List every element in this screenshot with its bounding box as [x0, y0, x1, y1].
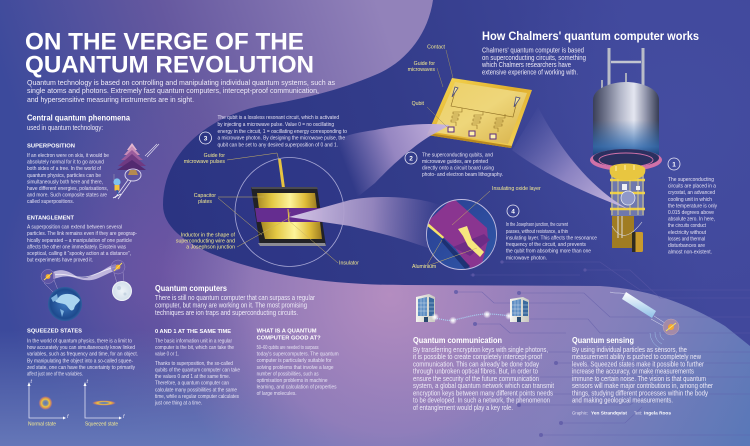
callouts on junction — [412, 186, 541, 270]
heading: central quantum phenomena: used in quantum technology: — [27, 123, 103, 132]
trace end dots — [454, 260, 587, 437]
text block: 0 and 1 at the same time: Therefore, a quantum computer can — [155, 381, 229, 387]
text block: squeezed states: affect just one of the variables. — [27, 372, 83, 378]
text block: 0 and 1 at the same time: value 0 or 1. — [155, 352, 179, 358]
step 3 text — [218, 115, 347, 148]
step 1 text: disturbances are — [668, 243, 705, 249]
chart: normal state: t — [30, 379, 32, 385]
step 1 number: 1 — [672, 162, 676, 168]
text block: what is a quantum computer good at: WHAT IS A QUANTUM — [257, 328, 317, 334]
step 4 number — [507, 205, 519, 217]
text block: quantum sensing: things, studying different processes within the body — [572, 388, 708, 397]
step 1 text: almost non-existent. — [668, 250, 712, 256]
dark panel: how the quantum computer works — [163, 0, 750, 346]
callouts around qubit: microwave pulses — [184, 159, 225, 165]
heading: central quantum phenomena: Central quantum phenomena — [27, 112, 130, 122]
text block: 0 and 1 at the same time: time, while a regular computer calculates — [155, 394, 239, 400]
step 1 text: losses and thermal — [668, 236, 705, 242]
text block: quantum communication — [413, 335, 554, 412]
text block: what is a quantum computer good at: learning, and calculation of properties — [257, 385, 337, 391]
text block: quantum communication: ensure the security of the future communication — [413, 374, 539, 383]
text block: quantum computers: Quantum computers — [155, 283, 227, 293]
step 1 text — [668, 177, 717, 256]
intro text: single atoms and photons. Extremely fast quantum computers, intercept-proof communication, — [27, 86, 319, 95]
text block: 0 and 1 at the same time — [154, 329, 240, 406]
text block: what is a quantum computer good at: 50–60 qubits are needed to surpass — [257, 345, 319, 351]
step 3 number: 3 — [204, 136, 208, 142]
text block: quantum computers — [155, 283, 315, 317]
text block: superposition: If an electron were on skis, it would be — [27, 153, 109, 159]
step 1 text: The superconducting — [668, 177, 714, 183]
text block: quantum communication: system, a global quantum network which can transmit — [413, 381, 554, 390]
beam: chip qubit to step 3 — [335, 124, 450, 215]
step 1 text: circuits are placed in a — [668, 184, 716, 190]
text block: entanglement: hically separated – a manipulation of one particle — [27, 238, 132, 244]
text block: what is a quantum computer good at — [257, 328, 339, 397]
heading: central quantum phenomena — [27, 112, 130, 132]
title: QUANTUM REVOLUTION — [25, 52, 314, 78]
text block: squeezed states: how accurately you can simultaneously know linked — [27, 345, 135, 351]
step 1 text: 0.015 degrees above — [668, 210, 714, 216]
text block: 0 and 1 at the same time: just one thing at a time. — [154, 400, 202, 406]
text block: squeezed states: SQUEEZED STATES — [27, 328, 82, 334]
text block: 0 and 1 at the same time: the values 0 and 1 at the same time. — [155, 374, 230, 380]
callouts around qubit: a Josephson junction — [186, 245, 235, 251]
step 4 text: insulating layer. This affects the resonance — [506, 235, 597, 241]
text block: quantum communication: By transferring encryption keys with single photons, — [413, 345, 548, 354]
callouts around qubit: Insulator — [339, 261, 359, 267]
text block: quantum communication: through unbroken optical fibres. But, in order to — [413, 367, 538, 376]
text block: quantum communication: it is possible to create completely intercept-proof — [413, 352, 543, 361]
text block: quantum sensing: and making geological measurements. — [572, 396, 673, 405]
text block: entanglement: but experiments have proved it. — [27, 258, 93, 264]
text block: quantum sensing: increase the accuracy, or make measurements — [572, 367, 694, 376]
intro text: Quantum technology is based on controlling and manipulating individual quantum systems, such as — [27, 78, 335, 87]
intro text: and hypersensitive measuring instruments are in sight. — [27, 95, 194, 104]
text block: quantum sensing: measurement ability is pushed to completely new — [572, 352, 702, 361]
intro: chalmers: Chalmers' quantum computer is based — [482, 46, 584, 54]
step 4 text: passes, without resistance, a thin — [506, 229, 568, 235]
step 3 text: The qubit is a lossless resonant circuit, which is activated — [218, 115, 339, 121]
text block: 0 and 1 at the same time: calculate many possibilities at the same — [155, 387, 237, 393]
step 4 text: microwave photon. — [506, 256, 547, 262]
callouts on chip: Qubit — [412, 101, 425, 107]
step 4 text: the qubit from absorbing more than one — [506, 249, 591, 255]
text block: 0 and 1 at the same time: qubits of the quantum computer can take — [155, 368, 240, 374]
text block: quantum communication: communication. This can already be done today — [413, 360, 539, 368]
text block: quantum sensing — [572, 335, 713, 405]
credits: Text: — [634, 410, 642, 416]
callouts around qubit — [176, 153, 359, 267]
step 4 text — [506, 222, 597, 262]
text block: entanglement: sceptical, calling it “spooky action at a distance”, — [27, 251, 131, 257]
text block: superposition: both sides of a tree. In the world of — [27, 166, 102, 172]
text block: quantum sensing: levels. Squeezed states make it possible to further — [572, 360, 704, 368]
beam: cryostat to chip — [512, 107, 628, 209]
credits: Graphic: — [572, 410, 588, 416]
step 2 number — [405, 152, 417, 164]
intro: chalmers: extensive experience of working with. — [482, 67, 578, 76]
text block: quantum communication: encryption keys between many different points needs — [413, 388, 553, 397]
text block: 0 and 1 at the same time: The basic information unit in a regular — [155, 338, 232, 344]
step 2 text: photo- and electron beam lithography. — [422, 172, 503, 178]
step 2 text: directly onto a circuit board using — [422, 166, 494, 172]
josephson junction magnifier — [425, 198, 496, 270]
quantum chip — [427, 78, 532, 148]
chart: normal state: Normal state — [28, 422, 56, 428]
callouts on chip: Contact — [427, 45, 446, 51]
entanglement illustration: earth, moon, entangled particles — [41, 260, 132, 321]
callouts on chip: microwaves — [408, 67, 435, 73]
text block: superposition: quantum physics, particles can be — [27, 173, 101, 179]
text block: what is a quantum computer good at: today's supercomputers. The quantum — [257, 352, 339, 358]
text block: quantum communication: of entanglement would play a key role. — [413, 403, 513, 412]
text block: what is a quantum computer good at: computer is particularly suitable for — [257, 358, 332, 364]
step 1 text: electricity without — [668, 230, 707, 236]
step 2 text: microwave guides, are printed — [422, 159, 488, 165]
text block: quantum computers: computer, but many are working on it. The most promising — [155, 300, 307, 309]
callouts on junction: Insulating oxide layer — [492, 186, 541, 192]
text block: 0 and 1 at the same time: 0 AND 1 AT THE SAME TIME — [155, 329, 231, 335]
step 1 text: the circuits conduct — [668, 223, 706, 229]
chart: normal state: f — [67, 414, 69, 420]
step 1 text: the temperature is only — [668, 203, 717, 209]
text block: superposition: called superpositions. — [27, 199, 74, 205]
intro: chalmers: which Chalmers researchers have — [481, 60, 571, 69]
callouts around qubit: Guide for — [204, 153, 225, 159]
text block: what is a quantum computer good at: COMPUTER GOOD AT? — [257, 336, 321, 342]
callouts on chip — [408, 45, 453, 127]
text block: quantum sensing: sensors will make major contributions in, among other — [572, 381, 713, 390]
text block: quantum communication: to be developed. In such a network, the phenomenon — [413, 396, 550, 405]
text block: 0 and 1 at the same time: Thanks to superposition, the so-called — [155, 361, 233, 367]
text block: superposition: simultaneously both here and there, — [27, 179, 103, 185]
text block: superposition: have different energies, polarisations, — [27, 186, 108, 192]
callouts around qubit: Capacitor — [194, 193, 216, 199]
step 1 number — [668, 158, 680, 170]
text block: quantum sensing: By using individual particles as sensors, the — [572, 345, 687, 354]
text block: entanglement: ENTANGLEMENT — [27, 216, 75, 222]
text block: quantum sensing: Quantum sensing — [572, 335, 634, 345]
step 4 number: 4 — [511, 208, 515, 216]
chart: squeezed state: Squeezed state — [85, 422, 118, 428]
text block: squeezed states: zed state, one can have the uncertainty to primarily — [27, 365, 135, 371]
text block: squeezed states — [27, 328, 138, 378]
text block: quantum communication: Quantum communication — [413, 335, 502, 345]
callouts around qubit: plates — [198, 199, 212, 205]
step 4 text: In the Josephson junction, the current — [506, 222, 568, 228]
icon: skier passing both sides of a tree — [113, 143, 159, 199]
title: ON THE VERGE OF THE — [25, 28, 304, 56]
text block: what is a quantum computer good at: optimisation problems in machine — [257, 378, 328, 384]
text block: what is a quantum computer good at: number of possibilities, such as — [257, 371, 319, 377]
qubit magnifier circle with capacitor plates — [235, 158, 344, 266]
callouts around qubit: Inductor in the shape of — [181, 233, 236, 239]
callouts on chip: Guide for — [414, 61, 435, 67]
chart: normal state — [28, 379, 69, 428]
text block: 0 and 1 at the same time: computer is the bit, which can take the — [155, 345, 234, 351]
callouts around qubit: superconducting wire and — [176, 239, 235, 245]
text block: entanglement: affects the other one immediately. Einstein was — [27, 244, 126, 250]
text block: superposition: absolutely normal for it to go around — [27, 160, 104, 166]
icon: buildings linked by photons — [416, 294, 529, 324]
circuit traces — [456, 262, 750, 435]
callouts on junction: Aluminium — [412, 264, 436, 270]
step 3 text: a microwave photon. By designing the microwave pulse, the — [218, 136, 345, 142]
title — [25, 28, 314, 78]
text block: squeezed states: In the world of quantum physics, there is a limit to — [27, 338, 132, 344]
step 1 text: absolute zero. In here, — [668, 217, 715, 223]
credits — [572, 410, 672, 416]
text block: squeezed states: By manipulating the object into a so-called squee- — [27, 358, 133, 364]
step 1 text: cryostat, an advanced — [668, 190, 715, 196]
text block: superposition — [27, 144, 109, 205]
chart: squeezed state: f — [123, 414, 125, 420]
text block: entanglement: A superposition can extend between several — [27, 225, 122, 231]
text block: superposition: and more. Such composite states are — [27, 193, 107, 199]
text block: entanglement: particles. The link remains even if they are geograp- — [27, 231, 137, 237]
intro: chalmers: on superconducting circuits, something — [482, 53, 586, 62]
step 3 text: energy in the circuit, 1 = oscillating energy corresponding to — [218, 129, 347, 135]
cryostat — [590, 48, 662, 252]
text block: quantum sensing: immune to certain noise. The vision is that quantum — [572, 374, 706, 383]
icon: quantum sensor probe — [610, 292, 679, 348]
text block: what is a quantum computer good at: of large molecules. — [257, 391, 297, 397]
text block: what is a quantum computer good at: solving problems that involve a large — [257, 365, 334, 371]
credits: Yen Strandqvist — [591, 410, 628, 416]
intro text — [27, 78, 335, 104]
text block: squeezed states: variables, such as frequency and time, for an object. — [27, 352, 138, 358]
step 2 text: The superconducting qubits, and — [422, 152, 493, 158]
chart: squeezed state: t — [86, 379, 88, 385]
credits: Ingela Roos — [644, 410, 672, 416]
intro: chalmers — [481, 46, 586, 76]
step 1 text: cooling unit in which — [668, 197, 712, 203]
text block: quantum computers: techniques are ion traps and superconducting circuits. — [155, 308, 298, 317]
text block: quantum computers: There is still no quantum computer that can surpass a regular — [155, 293, 315, 302]
step 2 text — [422, 152, 503, 178]
step 3 text: qubit can be set to any desired superposition of 0 and 1. — [218, 142, 338, 148]
step 2 number: 2 — [409, 156, 413, 162]
step 3 text: by injecting a microwave pulse. Value 0 = no oscillating — [218, 122, 334, 128]
step 4 text: frequency of the circuit, and prevents — [506, 242, 586, 248]
heading: how chalmers' quantum computer works: How Chalmers' quantum computer works — [482, 31, 699, 43]
step 3 number — [200, 132, 212, 144]
text block: superposition: SUPERPOSITION — [27, 144, 75, 150]
chart: squeezed state — [84, 379, 125, 428]
beam: junction to qubit — [289, 197, 440, 252]
text block: entanglement — [27, 216, 137, 264]
